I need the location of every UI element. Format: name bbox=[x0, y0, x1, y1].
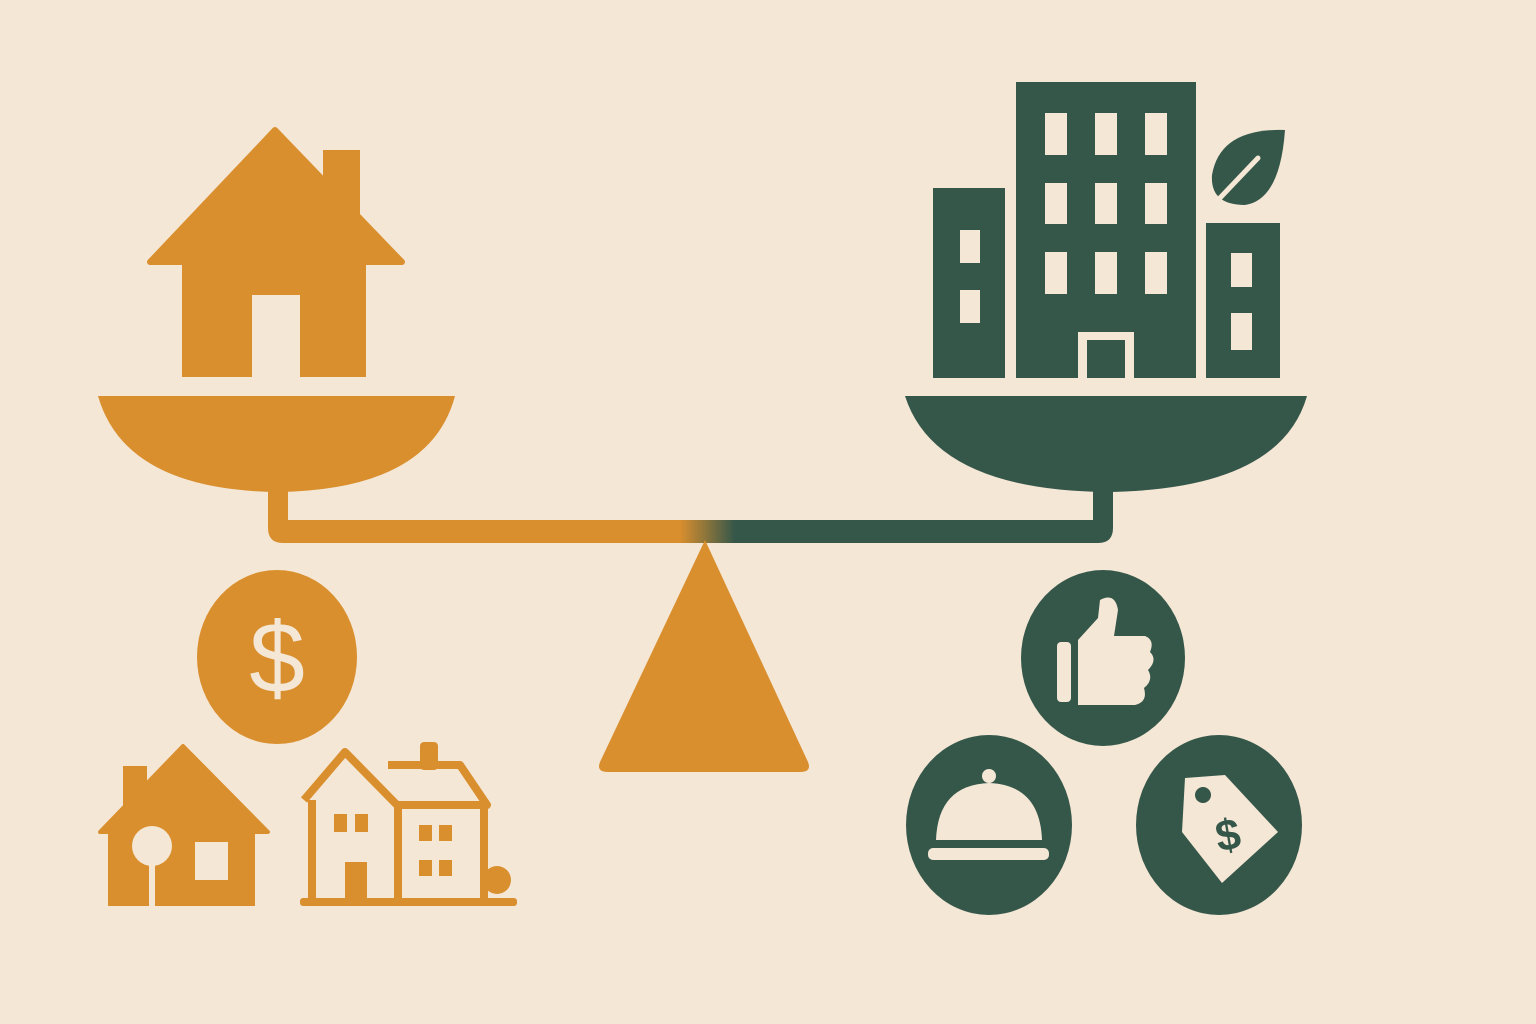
icon: house on left pan bbox=[150, 130, 402, 377]
right pan bbox=[905, 396, 1307, 492]
icon: dollar coin bbox=[197, 570, 357, 744]
icon: price tag circle: $ bbox=[1212, 809, 1244, 862]
beam bbox=[268, 488, 1113, 543]
icon: thumbs up circle bbox=[1021, 570, 1185, 746]
icon: dollar coin: $ bbox=[249, 602, 305, 714]
icon: townhouses bbox=[300, 746, 517, 906]
left pan bbox=[98, 396, 455, 492]
icon: small house with tree bbox=[100, 746, 268, 906]
icon: buildings with leaf bbox=[933, 82, 1285, 378]
fulcrum triangle bbox=[599, 540, 809, 772]
icon: price tag circle bbox=[1136, 735, 1302, 915]
icon: serving dish circle bbox=[906, 735, 1072, 915]
